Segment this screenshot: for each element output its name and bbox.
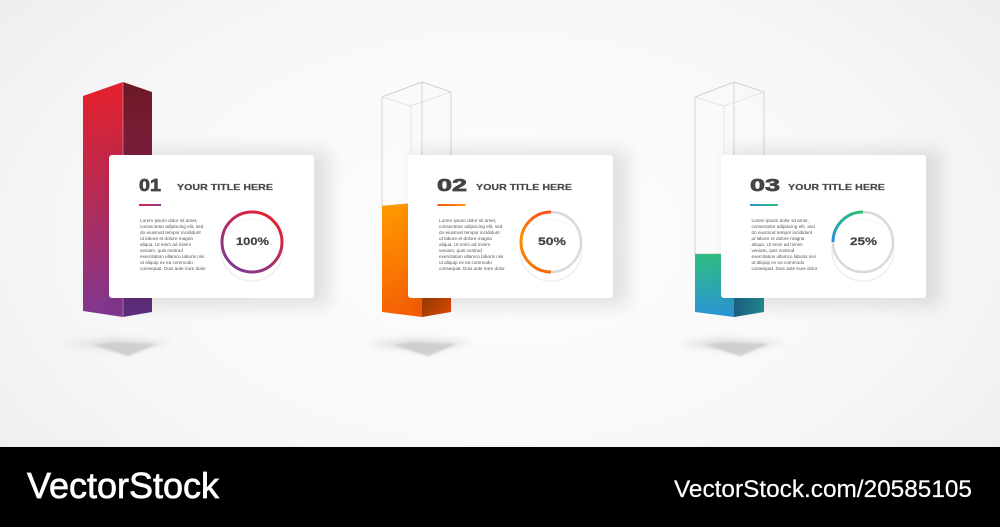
body text 02: do eiusmod tempor incididunt bbox=[439, 230, 500, 235]
body text 03: Lorem ipsum dolor sit amet, bbox=[752, 218, 809, 223]
card shadow 03 bbox=[729, 150, 941, 306]
body text 01: do eiusmod tempor incididunt bbox=[140, 230, 201, 235]
body text 02: veniam, quis nostrud bbox=[439, 248, 482, 253]
3D bar 03 quarter bbox=[695, 82, 764, 317]
body text 01: ut labore et dolore magna bbox=[140, 236, 193, 241]
number 03: 03 bbox=[750, 175, 780, 195]
body text 01: consequat. Duis aute irure dolor bbox=[140, 266, 206, 271]
body text 02: Lorem ipsum dolor sit amet, bbox=[439, 218, 496, 223]
body text 03: exercitation ullamco laboris nisi bbox=[752, 254, 816, 259]
body text 02: exercitation ullamco laboris nisi bbox=[439, 254, 503, 259]
body text 03: veniam, quis nostrud bbox=[752, 248, 795, 253]
body text 01: consectetur adipiscing elit, sed bbox=[140, 224, 204, 229]
ground shadow 03 bbox=[675, 338, 785, 356]
panel: step 02 bbox=[363, 82, 628, 356]
body text 01: ut aliquip ex ea commodo bbox=[140, 260, 193, 265]
title 02: YOUR TITLE HERE bbox=[476, 182, 572, 192]
ground shadow 01 bbox=[63, 338, 173, 356]
number 01: 01 bbox=[139, 175, 161, 195]
body text 03: consectetur adipiscing elit, sed bbox=[752, 224, 815, 229]
body text 03: aliqua. Ut enim ad minim bbox=[752, 242, 803, 247]
body text 01: exercitation ullamco laboris nisi bbox=[140, 254, 204, 259]
ring 03: 25% bbox=[850, 236, 877, 248]
panel: step 01 bbox=[63, 82, 329, 356]
body text 01: aliqua. Ut enim ad minim bbox=[140, 242, 191, 247]
underline 03 bbox=[750, 204, 778, 206]
ring 02: 50% bbox=[538, 236, 566, 248]
ring 01 bbox=[221, 212, 283, 281]
number 02: 02 bbox=[437, 175, 467, 195]
ring 03 bbox=[832, 212, 894, 281]
body text 01: Lorem ipsum dolor sit amet, bbox=[140, 218, 197, 223]
panel: step 03 bbox=[675, 82, 941, 356]
body text 01: veniam, quis nostrud bbox=[140, 248, 183, 253]
body text 02: aliqua. Ut enim ad minim bbox=[439, 242, 490, 247]
underline 01 bbox=[139, 204, 161, 206]
ring 02 bbox=[520, 212, 582, 281]
footer band bbox=[0, 447, 1000, 527]
body text 03: consequat. Duis aute irure dolor bbox=[752, 266, 818, 271]
underline 02 bbox=[438, 204, 466, 206]
title 03: YOUR TITLE HERE bbox=[788, 182, 885, 192]
card 01 bbox=[109, 155, 314, 298]
body text 02: consequat. Duis aute irure dolor bbox=[439, 266, 505, 271]
card shadow 02 bbox=[416, 150, 628, 306]
body text 02: consectetur adipiscing elit, sed bbox=[439, 224, 503, 229]
card shadow 01 bbox=[117, 150, 329, 306]
card 02 bbox=[408, 155, 613, 298]
body text 02: ut aliquip ex ea commodo bbox=[439, 260, 492, 265]
ground shadow 02 bbox=[363, 338, 473, 356]
body text 03: ut labore et dolore magna bbox=[752, 236, 805, 241]
title 01: YOUR TITLE HERE bbox=[177, 182, 273, 192]
body text 03: ut aliquip ex ea commodo bbox=[752, 260, 805, 265]
card 03 bbox=[721, 155, 926, 298]
ring 01: 100% bbox=[236, 236, 269, 248]
body text 03: do eiusmod tempor incididunt bbox=[752, 230, 813, 235]
body text 02: ut labore et dolore magna bbox=[439, 236, 492, 241]
3D bar 01 full bbox=[83, 82, 152, 317]
footer image id: VectorStock.com/20585105 bbox=[674, 476, 972, 503]
3D bar 02 half bbox=[382, 82, 451, 317]
footer logo: VectorStock bbox=[27, 465, 220, 506]
